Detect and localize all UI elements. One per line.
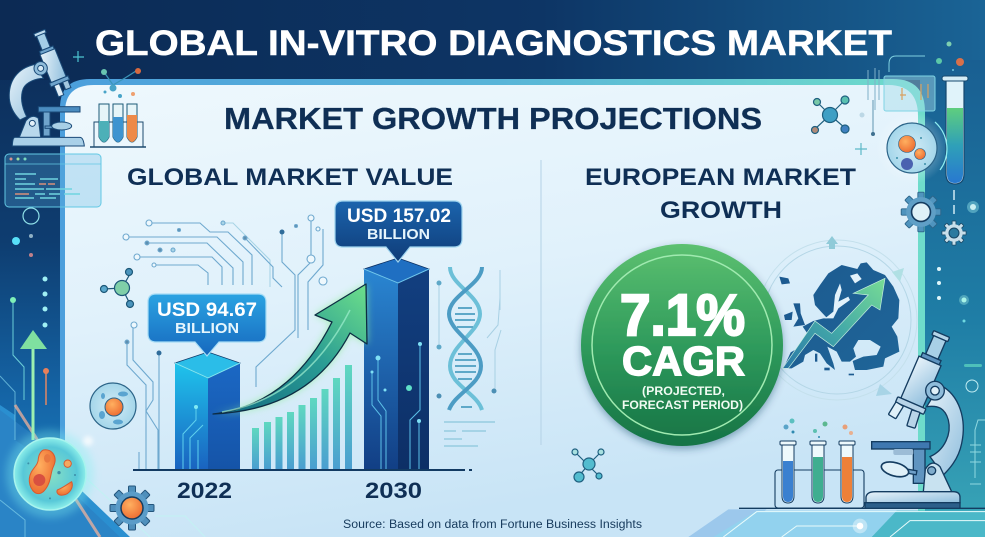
badge: 7.1% CAGR: (PROJECTED, — [642, 386, 725, 398]
heading: european market growth — [585, 164, 856, 224]
bar: 2022 — [175, 352, 240, 469]
icon: orange gear — [110, 486, 154, 530]
icon: cell — [90, 383, 136, 429]
title: GLOBAL IN-VITRO DIAGNOSTICS MARKET — [95, 24, 892, 63]
icon: molecule lower — [572, 449, 604, 482]
bar: 2030 — [364, 258, 429, 469]
heading: global market value: GLOBAL MARKET VALUE — [127, 164, 453, 191]
arrow: Europe growth — [783, 278, 885, 368]
icon: bacteria in glowing circle — [6, 430, 94, 518]
badge: 7.1% CAGR: CAGR — [622, 338, 745, 384]
badge: 7.1% CAGR: 7.1% — [620, 283, 745, 348]
map: Europe with rings — [757, 236, 917, 400]
icon: molecule left — [100, 268, 134, 308]
heading: european market growth: EUROPEAN MARKET — [585, 164, 856, 191]
icon: right test tube — [936, 42, 968, 184]
icon: right microscope — [865, 327, 963, 508]
icon: DNA helix — [436, 267, 501, 446]
icon: left test tubes — [73, 51, 146, 147]
icon: left microscope — [9, 28, 84, 146]
icon: right cell — [876, 112, 948, 184]
callout: USD 157.02 billion — [335, 201, 462, 262]
callout: USD 94.67 billion — [148, 294, 266, 356]
callout: USD 94.67 billion: BILLION — [175, 320, 239, 337]
arrow: growth — [213, 284, 367, 414]
heading: market growth projections: MARKET GROWTH PROJECTIONS — [224, 101, 762, 136]
axis — [133, 469, 472, 471]
callout: USD 94.67 billion: USD 94.67 — [157, 300, 257, 321]
icon: molecule upper — [812, 96, 849, 134]
left decorative lower strip — [0, 208, 205, 537]
label: 2022: 2022 — [177, 478, 232, 503]
bottom right floor — [688, 508, 985, 537]
small trend bars — [252, 365, 352, 469]
callout: USD 157.02 billion: BILLION — [367, 226, 430, 243]
icon: lower test tubes — [775, 418, 864, 508]
panel: main content area — [60, 79, 925, 537]
badge: 7.1% CAGR — [581, 244, 783, 446]
heading: european market growth: GROWTH — [660, 197, 782, 224]
bar chart — [133, 258, 472, 503]
circuit lines — [123, 215, 327, 470]
label: 2030: 2030 — [365, 478, 422, 503]
callout: USD 157.02 billion: USD 157.02 — [347, 206, 451, 227]
right decorative side elements — [855, 56, 985, 484]
icon: right gears — [901, 192, 966, 245]
source note: Source: Based on data from Fortune Business Insights — [343, 519, 642, 531]
icon: code window — [5, 154, 101, 207]
badge: 7.1% CAGR: FORECAST PERIOD) — [622, 400, 743, 412]
